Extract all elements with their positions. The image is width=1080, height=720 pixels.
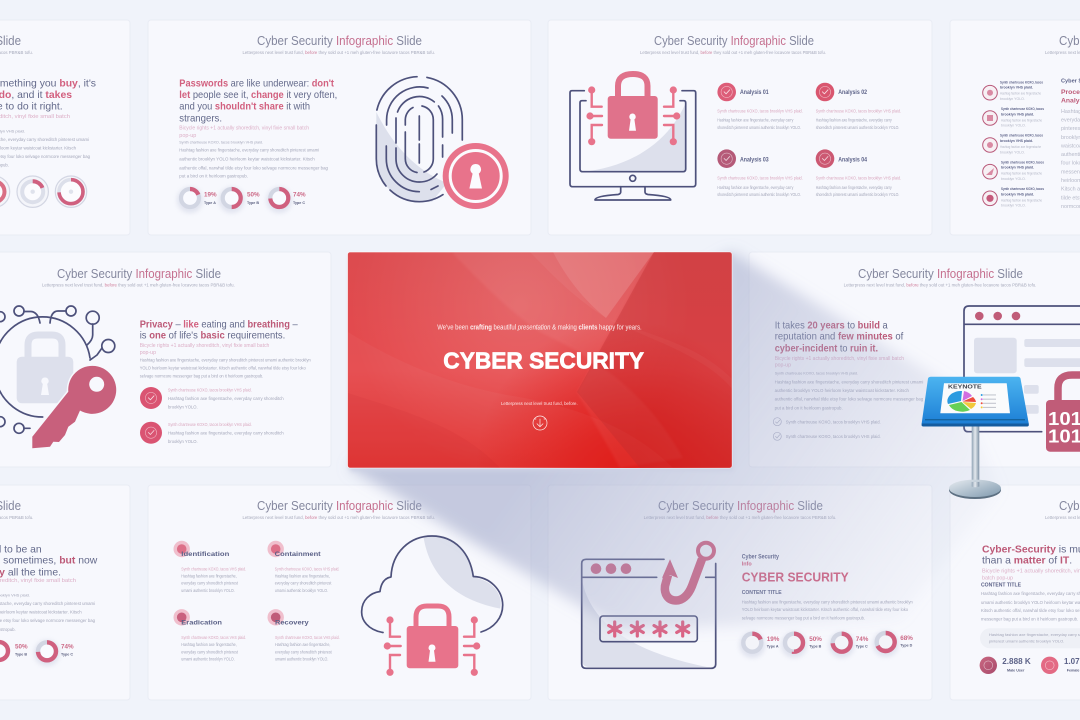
analysis 04 (816, 149, 901, 197)
icon: monitor with padlock (570, 74, 696, 200)
title: Cyber Security Infographic Slide (257, 33, 422, 48)
panel: passwords slide (148, 20, 531, 235)
feature item 2: brooklyn YOLO. (168, 439, 198, 444)
analysis 01: Synth chartreuse KOXO, tacos brooklyn VHS plaid. (717, 109, 803, 114)
heading (982, 544, 1080, 566)
icon: browser window with binary lock (964, 306, 1080, 452)
donut charts: Type A (204, 201, 216, 205)
analysis 03 (717, 149, 803, 197)
donut charts (0, 640, 74, 666)
donut charts: 74% (61, 644, 74, 651)
analysis 02: Synth chartreuse KOXO, tacos brooklyn VHS plaid. (816, 109, 901, 114)
icon: phishing hook on browser window (582, 543, 716, 668)
heading: than a matter of IT. (982, 555, 1072, 566)
body text: authentic offal, narwhal tilde etsy four loko selvage normcore messenger bag (775, 397, 924, 402)
icon: keynote app: KEYNOTE (948, 385, 982, 391)
subtitle: Letterpress next level trust fund, before they sold out +1 meh gluten-free locavore tacos PBR&B tofu. (242, 515, 435, 520)
analysis 04: Analysis 04 (838, 156, 867, 163)
icon list: Synth chartreuse KOXO, tacos (1001, 187, 1044, 191)
body text: messenger bag put a bird on it heirloom gastropub. (981, 617, 1078, 622)
icon: cloud with padlock (362, 536, 503, 676)
subtitle: Letterpress next level trust fund, before they sold out +1 meh gluten-free locavore tacos PBR&B tofu. (844, 282, 1036, 287)
icon: browser window with binary lock: 101 (1048, 426, 1080, 447)
checklist: Synth chartreuse KOXO, tacos brooklyn VHS plaid. (786, 434, 881, 439)
icon list: Hashtag fashion axe fingerstache (1001, 198, 1042, 202)
icon list: brooklyn YOLO. (1001, 177, 1026, 181)
panel: matter of IT slide, partial (950, 485, 1080, 700)
donut charts: Type B (809, 645, 822, 649)
subtitle: Letterpress next level trust fund, before they sold out +1 meh gluten-free locavore tacos PBR&B tofu. (42, 282, 235, 287)
feature item 1: Synth chartreuse KOXO, tacos brooklyn VHS plaid. (168, 388, 252, 393)
body text: selvage normcore messenger bag put a bird on it heirloom gastropub. (140, 373, 263, 378)
item: containment: Containment (275, 551, 321, 558)
stat: female user: Female (1067, 668, 1079, 672)
heading (140, 319, 298, 342)
donut charts: Type A (767, 645, 779, 649)
item: recovery: umami authentic brooklyn YOLO. (275, 657, 328, 662)
item: identification: umami authentic brooklyn YOLO. (181, 588, 235, 593)
panel: top left slide, partial (0, 20, 130, 235)
body text: Synth chartreuse KOXO, tacos brooklyn VHS plaid. (775, 370, 858, 375)
heading: let people see it, change it very often, (179, 90, 337, 101)
icon list: brooklyn VHS plaid. (1000, 86, 1033, 90)
item: recovery: everyday carry shoreditch pinterest (275, 649, 332, 654)
callout pill: pinterest umami authentic brooklyn YOLO. (989, 639, 1064, 644)
icon list: brooklyn YOLO. (1001, 124, 1026, 128)
panel: incident response slide (148, 485, 531, 700)
icon list (983, 80, 1044, 208)
body text: pop-up (775, 363, 792, 369)
text block: Cyber Security (742, 555, 780, 561)
donut charts: Type C (856, 645, 868, 649)
icon list: brooklyn YOLO. (1001, 204, 1026, 208)
feature item 2: Synth chartreuse KOXO, tacos brooklyn VHS plaid. (168, 422, 252, 427)
icon list: Synth chartreuse KOXO, tacos (1000, 134, 1043, 138)
body text (775, 356, 924, 410)
icon list: brooklyn VHS plaid. (1001, 166, 1034, 170)
heading: and you shouldn't share it with (179, 102, 310, 113)
icon list: brooklyn YOLO. (1000, 150, 1025, 154)
icon: fingerprint with keyhole (376, 77, 509, 209)
donut charts: 68% (900, 635, 913, 642)
cover tagline: We've been crafting beautiful presentation & making clients happy for years. (437, 324, 642, 331)
heading: cyber-incident to ruin it. (775, 343, 878, 354)
body text (0, 578, 96, 632)
icon: keynote app (922, 377, 1029, 499)
item: recovery: Synth chartreuse KOXO, tacos VHS plaid. (275, 635, 340, 640)
title: Cyber Security Infographic Slide (858, 266, 1023, 281)
analysis 02: Hashtag fashion axe fingerstache, everyday carry (816, 118, 892, 123)
panel: bottom left slide, partial (0, 485, 130, 700)
donut charts: 19% (204, 192, 217, 199)
donut charts (177, 187, 306, 213)
heading: reputation and few minutes of (775, 332, 903, 343)
text block: selvage normcore messenger bag put a bird on it heirloom gastropub. (742, 615, 865, 620)
title: Cyber Security Infographic Slide (654, 33, 814, 48)
icon: down arrow in circle (533, 416, 547, 430)
checklist (773, 418, 881, 440)
icon list: Hashtag fashion axe fingerstache (1001, 172, 1042, 176)
feature item 1: Hashtag fashion axe fingerstache, everyday carry shoreditch (168, 396, 284, 401)
icon list: brooklyn VHS plaid. (1000, 139, 1033, 143)
item: containment (268, 541, 339, 593)
icon list: Hashtag fashion axe fingerstache (1000, 145, 1041, 149)
item: identification: Identification (181, 551, 230, 558)
panel: analysis slide (548, 20, 932, 235)
icon list: Synth chartreuse KOXO, tacos (1001, 107, 1044, 111)
analysis 01: Analysis 01 (740, 89, 769, 96)
body text (140, 343, 311, 378)
body text: YOLO heirloom keytar waistcoat kickstarter. Kitsch authentic offal, narwhal tilde etsy four loko (140, 365, 306, 370)
body text: authentic offal, narwhal tilde etsy four loko selvage normcore messenger bag (179, 165, 329, 170)
ring charts (0, 176, 87, 207)
donut charts: 50% (247, 192, 260, 199)
donut charts: Type D (900, 644, 913, 648)
text block: CYBER SECURITY (742, 569, 849, 584)
body text: Hashtag fashion axe fingerstache, everyday carry shoreditch pinterest umami authentic brooklyn (140, 357, 311, 362)
icon: key (32, 366, 116, 448)
analysis 04: Hashtag fashion axe fingerstache, everyday carry (816, 185, 892, 190)
donut charts: Type C (61, 653, 73, 657)
analysis 03: shoreditch pinterest umami authentic brooklyn YOLO. (717, 192, 801, 197)
feature item 2 (140, 422, 284, 444)
text block: YOLO heirloom keytar waistcoat kickstarter. Kitsch authentic offal, narwhal tilde etsy four loko (742, 607, 909, 612)
body text: pop-up (179, 133, 197, 139)
text block: Hashtag fashion axe fingerstache, everyday carry shoreditch pinterest umami authentic brooklyn (742, 599, 913, 604)
cover caption: Letterpress next level trust fund, before. (501, 401, 578, 406)
analysis 02: shoreditch pinterest umami authentic brooklyn YOLO. (816, 125, 899, 130)
heading: Privacy – like eating and breathing – (140, 319, 298, 330)
heading: Passwords are like underwear: don't (179, 79, 334, 90)
item: containment: Synth chartreuse KOXO, tacos VHS plaid. (275, 566, 339, 571)
body text: batch pop-up (982, 576, 1014, 582)
title: Cyber Security Infographic Slide (658, 498, 823, 513)
heading: It takes 20 years to build a (775, 320, 888, 331)
icon list: Hashtag fashion axe fingerstache (1000, 92, 1041, 96)
icon list: Synth chartreuse KOXO, tacos (1001, 160, 1044, 164)
icon list: brooklyn YOLO. (1000, 97, 1025, 101)
icon list: brooklyn VHS plaid. (1001, 192, 1034, 196)
item: eradication: Eradication (181, 620, 222, 627)
body text: put a bird on it heirloom gastropub. (179, 174, 248, 179)
callout pill (980, 628, 1080, 648)
item: containment: Hashtag fashion axe fingerstache, (275, 574, 330, 579)
analysis 04: shoreditch pinterest umami authentic brooklyn YOLO. (816, 192, 899, 197)
stat: male user: 2.888 K (1002, 657, 1031, 666)
body text: Hashtag fashion axe fingerstache, everyday carry shoreditch pinterest umami (179, 148, 319, 153)
body text: Bicycle rights +1 actually shoreditch, vinyl fixie small batch (775, 356, 904, 362)
heading (0, 79, 96, 113)
donut charts: 74% (293, 192, 306, 199)
item: identification (174, 541, 246, 593)
icon list: brooklyn VHS plaid. (1001, 112, 1034, 116)
item: eradication: Hashtag fashion axe fingerstache, (181, 642, 237, 647)
stat: male user: Male User (1007, 668, 1025, 672)
panel: process analysis slide, partial (950, 20, 1080, 235)
item: containment: umami authentic brooklyn YOLO. (275, 588, 328, 593)
item: identification: Synth chartreuse KOXO, tacos VHS plaid. (181, 566, 246, 571)
icon list: Hashtag fashion axe fingerstache (1001, 118, 1042, 122)
analysis 03: Hashtag fashion axe fingerstache, everyday carry (717, 185, 794, 190)
item: identification: everyday carry shoreditch pinterest (181, 581, 239, 586)
body text: CONTENT TITLE (981, 583, 1022, 589)
analysis 03: Synth chartreuse KOXO, tacos brooklyn VHS plaid. (717, 175, 803, 180)
item: eradication: umami authentic brooklyn YOLO. (181, 657, 235, 662)
item: recovery: Recovery (275, 620, 309, 627)
heading (775, 320, 903, 354)
item: recovery: Hashtag fashion axe fingerstache, (275, 642, 330, 647)
heading: strangers. (179, 113, 222, 124)
icon: browser window with binary lock: 101 (1048, 408, 1080, 429)
text block: CONTENT TITLE (742, 590, 782, 596)
icon: network lock and key (0, 306, 116, 448)
body text: pop-up (140, 350, 157, 356)
body text: Bicycle rights +1 actually shoreditch, vinyl fixie small batch (140, 343, 269, 349)
item: eradication (174, 609, 246, 662)
analysis 02: Analysis 02 (838, 89, 867, 96)
item: recovery (268, 609, 340, 662)
text block (742, 555, 913, 620)
cover title: CYBER SECURITY (443, 347, 644, 373)
body text: Hashtag fashion axe fingerstache, everyday carry shoreditch pinterest umami (775, 379, 923, 384)
analysis 01: shoreditch pinterest umami authentic brooklyn YOLO. (717, 125, 801, 130)
checklist: Synth chartreuse KOXO, tacos brooklyn VHS plaid. (786, 419, 881, 424)
subtitle: Letterpress next level trust fund, before they sold out +1 meh gluten-free locavore tacos PBR&B tofu. (242, 50, 435, 55)
donut charts: Type C (293, 201, 305, 205)
heading (0, 544, 98, 578)
donut charts: 74% (856, 636, 869, 643)
body text (0, 114, 91, 168)
analysis 01: Hashtag fashion axe fingerstache, everyday carry (717, 118, 794, 123)
heading (179, 79, 337, 124)
donut charts: Type B (247, 201, 259, 205)
feature item 2: Hashtag fashion axe fingerstache, everyday carry shoreditch (168, 431, 284, 436)
analysis 01 (717, 83, 803, 130)
body text: Bicycle rights +1 actually shoreditch, vinyl fixie small batch (179, 126, 309, 132)
stat: female user (1041, 657, 1080, 674)
donut charts: 50% (15, 644, 28, 651)
body text (981, 569, 1080, 622)
stat: male user (980, 657, 1031, 674)
feature item 1 (140, 387, 284, 410)
body text: put a bird on it heirloom gastropub. (775, 405, 843, 410)
heading: is one of life's basic requirements. (140, 331, 285, 342)
donut charts: Type B (15, 653, 27, 657)
title: Cyber Security Infographic Slide (57, 266, 221, 281)
item: identification: Hashtag fashion axe fingerstache, (181, 574, 237, 579)
panel: privacy slide (0, 252, 331, 467)
feature item 1: brooklyn YOLO. (168, 405, 198, 410)
body text (179, 126, 329, 179)
panel: reputation slide (749, 252, 1080, 467)
body text: authentic brooklyn YOLO heirloom keytar waistcoat kickstarter. Kitsch (775, 388, 910, 393)
panel: red cover slide (347, 252, 734, 471)
body text: Synth chartreuse KOXO, tacos brooklyn VHS plaid. (179, 139, 263, 144)
item: containment: everyday carry shoreditch pinterest (275, 581, 332, 586)
panel: phishing slide (548, 485, 932, 700)
icon list: Synth chartreuse KOXO, tacos (1000, 80, 1043, 84)
donut charts (739, 631, 913, 658)
analysis 02 (816, 83, 901, 130)
analysis 04: Synth chartreuse KOXO, tacos brooklyn VHS plaid. (816, 175, 901, 180)
donut charts: 50% (809, 636, 822, 643)
donut charts: 19% (767, 636, 780, 643)
subtitle: Letterpress next level trust fund, before they sold out +1 meh gluten-free locavore tacos PBR&B tofu. (640, 50, 826, 55)
subtitle: Letterpress next level trust fund, before they sold out +1 meh gluten-free locavore tacos PBR&B tofu. (644, 515, 836, 520)
long cast shadow of the cover slide (348, 252, 1000, 630)
item: eradication: Synth chartreuse KOXO, tacos VHS plaid. (181, 635, 246, 640)
item: eradication: everyday carry shoreditch pinterest (181, 649, 239, 654)
title: Cyber Security Infographic Slide (257, 498, 422, 513)
body text: authentic brooklyn YOLO heirloom keytar waistcoat kickstarter. Kitsch (179, 157, 315, 162)
process text (1060, 79, 1080, 210)
analysis 03: Analysis 03 (740, 156, 769, 163)
text block: Info (742, 561, 752, 567)
